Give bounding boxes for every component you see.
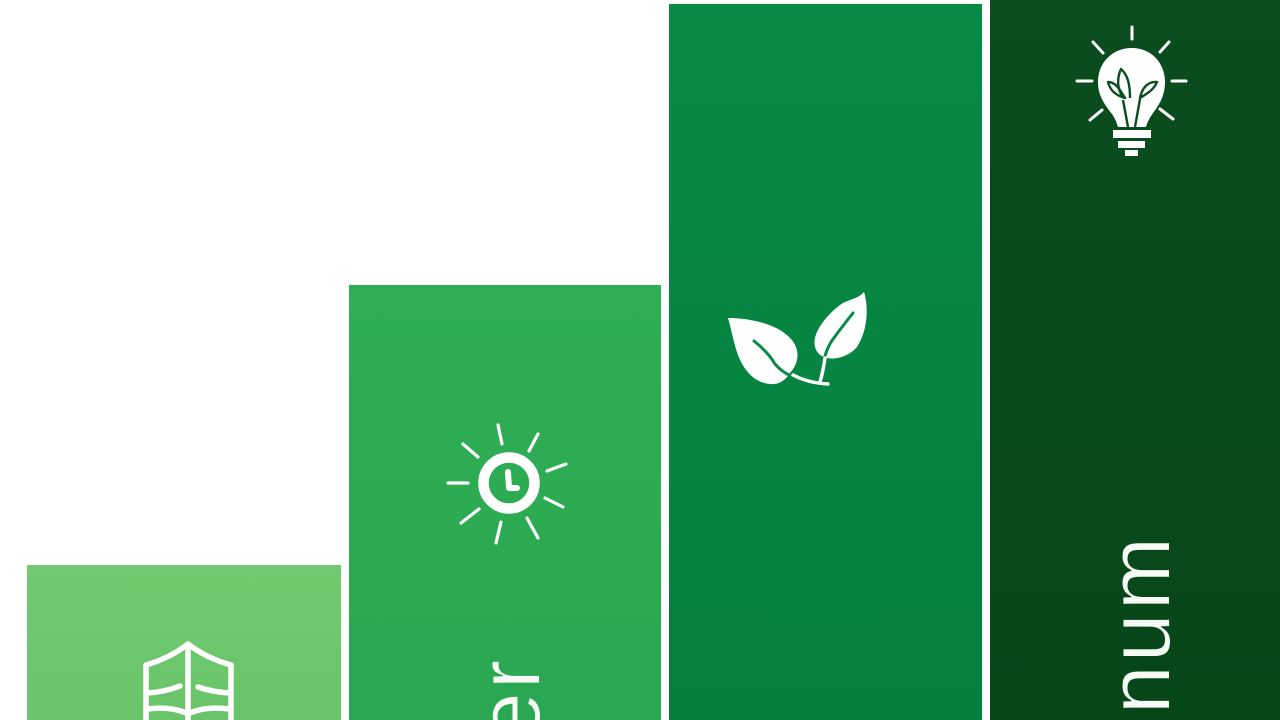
panel: first tier bar: [27, 565, 341, 720]
panel: second tier bar: [349, 285, 661, 720]
icon: two leaves: [728, 292, 867, 384]
icon: light bulb with leaves: [1077, 27, 1186, 156]
panel: third tier bar: [669, 4, 982, 720]
icon: sun clock: [448, 425, 566, 543]
panel: fourth tier bar: [990, 0, 1280, 720]
icon: building: [146, 644, 231, 720]
